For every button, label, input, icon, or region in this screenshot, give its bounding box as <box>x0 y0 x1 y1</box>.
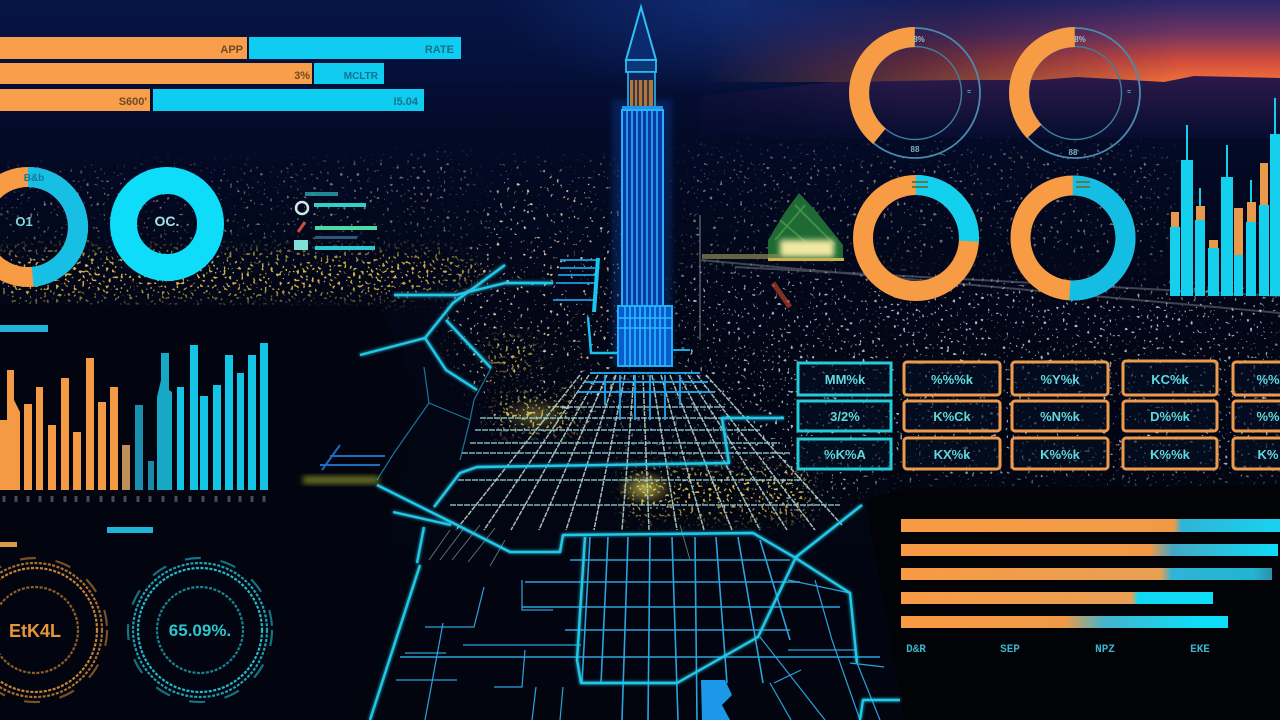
ring gauge: top right B: = <box>1127 89 1131 96</box>
table column: orange boxes 2: %Y%k <box>1040 372 1080 387</box>
donut chart: cyan <box>124 180 210 268</box>
dark panel: lower right <box>865 486 1280 720</box>
table column: orange boxes 3: K%%k <box>1150 447 1191 462</box>
table column: orange boxes 3: KC%k <box>1151 372 1190 387</box>
table column: orange boxes 1: KX%k <box>934 447 971 462</box>
legend: small icons with labels <box>294 192 377 250</box>
map: main glowing roads <box>360 265 900 720</box>
donut chart: left orange and cyan <box>0 173 78 277</box>
ring gauge: lower A <box>863 182 969 291</box>
table column: orange boxes 4: %% <box>1256 372 1280 387</box>
stacked bar: top left, row 1: APP <box>220 44 243 56</box>
stacked bar: top left, row 2 <box>0 63 384 84</box>
stacked bar: top left, row 1: RATE <box>425 44 454 56</box>
donut chart: cyan: OC. <box>155 213 179 229</box>
axis labels: lower right chart: D&R <box>906 644 926 656</box>
table column: orange boxes 2: K%%k <box>1040 447 1081 462</box>
table column: orange boxes 3: D%%k <box>1150 409 1191 424</box>
ring gauge: top right B <box>1010 28 1140 158</box>
map: lower street grid <box>377 367 884 720</box>
ring gauge: top right A: 8% <box>913 35 925 44</box>
axis labels: lower right chart: NPZ <box>1095 644 1115 656</box>
axis labels: lower right chart: SEP <box>1000 644 1020 656</box>
stacked bar: top left, row 2: MCLTR <box>344 71 379 82</box>
dial: orange <box>0 558 107 702</box>
table column: orange boxes 4 <box>1233 362 1280 469</box>
stacked bar: top left, row 3: S600' <box>119 96 147 108</box>
stacked bar: top left, row 3 <box>0 89 424 111</box>
tower: illuminated skyscraper <box>612 7 672 366</box>
donut chart: left orange and cyan: B&b <box>24 173 44 184</box>
bar chart: right cyan and orange series <box>1170 98 1280 296</box>
axis labels: lower right chart <box>906 644 1210 656</box>
city lights: scattered lights across the horizon and districts <box>0 135 1280 530</box>
ring gauge: top right A: = <box>967 89 971 96</box>
dial: cyan <box>128 558 272 702</box>
table column: orange boxes 1: %%%k <box>931 372 974 387</box>
bar chart: left orange and cyan series <box>0 343 268 502</box>
dial: cyan: 65.09%. <box>169 621 231 640</box>
dial: orange: EtK4L <box>9 621 61 641</box>
bar chart: lower right horizontal bars <box>901 519 1280 628</box>
axis labels: lower right chart: EKE <box>1190 644 1210 656</box>
stacked bar: top left, row 3: I5.04 <box>394 96 419 108</box>
map: small lit district, lower left <box>303 445 385 484</box>
table column: cyan boxes <box>798 363 891 469</box>
table column: cyan boxes: 3/2% <box>830 409 860 424</box>
table column: orange boxes 4: K% <box>1258 447 1279 462</box>
map: bright water block <box>701 680 732 720</box>
background: night sky and ground <box>0 0 1280 280</box>
tower: side buildings <box>553 258 690 353</box>
ring gauge: top right B: 88 <box>1069 148 1078 157</box>
ring gauge: lower B <box>1020 182 1126 290</box>
table: metric boxes <box>798 361 1280 469</box>
ring gauge: top right A: 88 <box>911 145 920 154</box>
donut chart: left orange and cyan: O1 <box>15 214 33 229</box>
label strip above the left bar chart <box>0 325 48 332</box>
ring gauge: top right B: 8% <box>1074 35 1086 44</box>
table column: orange boxes 1: K%Ck <box>933 409 972 424</box>
stacked bar: top left, row 1 <box>0 37 461 59</box>
table column: orange boxes 2: %N%k <box>1040 409 1081 424</box>
table column: cyan boxes: MM%k <box>825 372 866 387</box>
ring gauge: top right A <box>850 28 980 158</box>
map: upper street grid with lights <box>429 373 842 566</box>
stacked bar: top left, row 2: 3% <box>294 70 310 82</box>
table column: orange boxes 3 <box>1123 361 1217 469</box>
table column: orange boxes 2 <box>1012 362 1108 469</box>
table column: cyan boxes: %K%A <box>824 447 867 462</box>
table column: orange boxes 4: %% <box>1256 409 1280 424</box>
landmark: green dome building <box>702 193 844 261</box>
dark panel: lower left <box>0 304 420 720</box>
table column: orange boxes 1 <box>904 362 1000 469</box>
label strips above the dials <box>0 527 153 547</box>
